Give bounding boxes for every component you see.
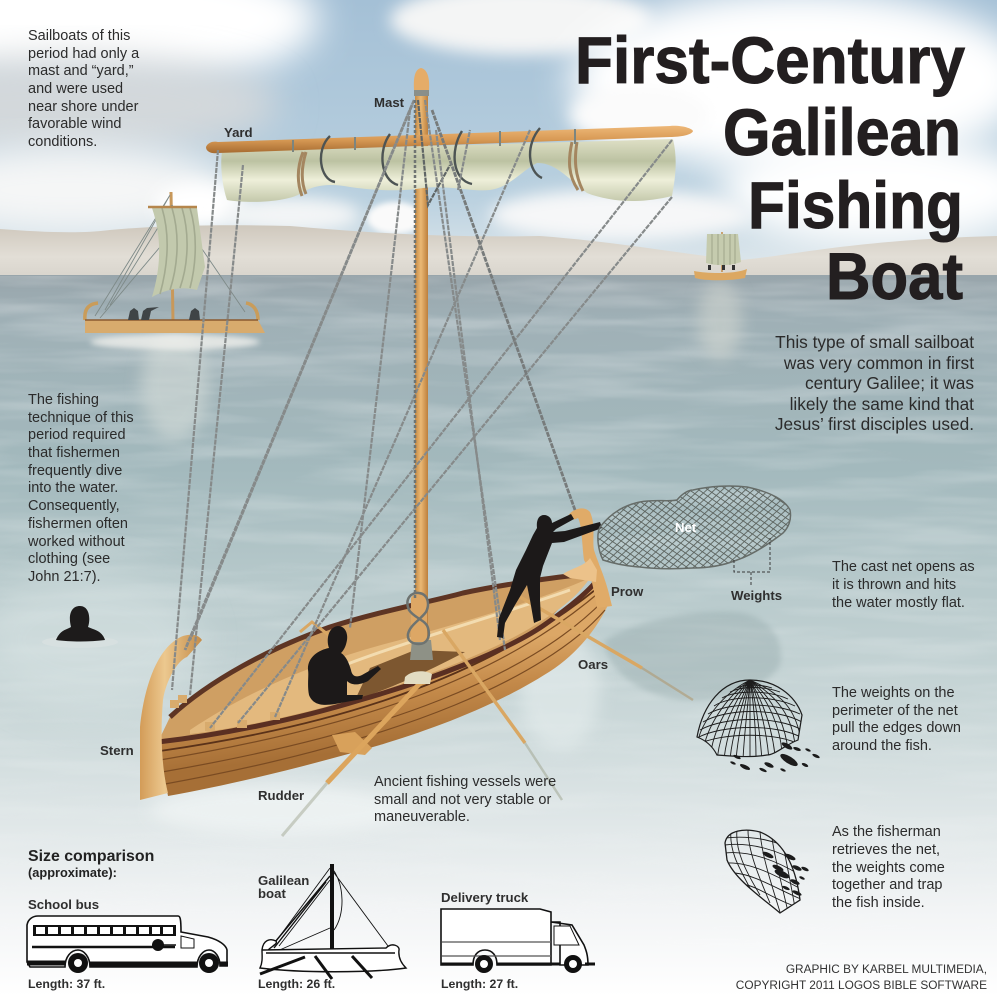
cast net — [598, 486, 791, 569]
mast with top knob — [410, 68, 433, 660]
yard — [206, 126, 693, 185]
text: fishing technique: that fishermen — [28, 445, 120, 461]
trapped fish — [762, 850, 809, 897]
clouds — [0, 0, 997, 245]
fish school — [730, 741, 820, 773]
part labels: Mast — [374, 95, 405, 110]
part labels: Oars — [578, 657, 608, 672]
part labels — [100, 95, 782, 803]
size comparison heading — [28, 848, 154, 880]
text: weights: perimeter of the net — [832, 703, 958, 719]
seated fisherman — [308, 626, 381, 705]
text: fishing technique: period required — [28, 427, 126, 443]
background boat: right — [694, 232, 747, 280]
intro text: sailboat type: was very common in first — [783, 353, 974, 373]
title — [575, 23, 965, 313]
mast partner block — [407, 593, 429, 644]
delivery truck comparison: Length: 27 ft. — [441, 977, 518, 991]
delivery truck comparison: Delivery truck — [441, 890, 529, 905]
title: Boat — [826, 239, 963, 313]
text: retrieving net — [832, 824, 945, 911]
delivery truck comparison — [441, 890, 595, 991]
text: ancient vessels: maneuverable. — [374, 809, 470, 825]
title: First-Century — [575, 23, 965, 97]
standing fisherman — [497, 514, 602, 638]
intro text: sailboat type: This type of small sailboat — [775, 332, 974, 352]
text: sailboats of this period: favorable wind — [28, 116, 122, 132]
text: retrieving net: the fish inside. — [832, 895, 925, 911]
text: sailboats of this period — [28, 28, 140, 150]
text: ancient vessels — [374, 774, 556, 825]
text: sailboats of this period: and were used — [28, 81, 123, 97]
text: retrieving net: the weights come — [832, 860, 945, 876]
intro text: sailboat type: Jesus’ first disciples used. — [775, 414, 974, 434]
prow cap — [563, 558, 597, 582]
water — [0, 275, 997, 996]
intro text: sailboat type — [775, 332, 974, 434]
sail — [221, 139, 676, 202]
title: Fishing — [748, 168, 963, 242]
text: sailboats of this period: Sailboats of this — [28, 28, 130, 44]
text: retrieving net: As the fisherman — [832, 824, 941, 840]
rudder block — [332, 732, 372, 755]
text: retrieving net: together and trap — [832, 877, 942, 893]
text: sailboats of this period: conditions. — [28, 134, 97, 150]
text: fishing technique: into the water. — [28, 480, 118, 496]
text: fishing technique: John 21:7). — [28, 569, 101, 585]
text: weights: pull the edges down — [832, 720, 961, 736]
swimmer — [42, 606, 118, 648]
net shadow on water — [605, 612, 781, 701]
text: ancient vessels: Ancient fishing vessels were — [374, 774, 556, 790]
net diagram: falling over fish — [697, 680, 820, 773]
text: fishing technique: technique of this — [28, 410, 134, 426]
text: weights: around the fish. — [832, 738, 932, 754]
background boat: left — [85, 192, 265, 333]
water ripples — [0, 276, 997, 672]
credit — [736, 962, 987, 992]
part labels: Rudder — [258, 788, 304, 803]
part labels: Yard — [224, 125, 253, 140]
main boat hull — [140, 573, 608, 800]
sky background — [0, 0, 997, 280]
text: cast net: The cast net opens as — [832, 559, 975, 575]
part labels: Prow — [611, 584, 644, 599]
size comparison heading: (approximate): — [28, 865, 117, 880]
oars and rudder — [282, 597, 693, 836]
text: sailboats of this period: mast and “yard,” — [28, 63, 134, 79]
hull planks — [158, 580, 608, 796]
text: weights — [832, 685, 961, 754]
text: fishing technique: Consequently, — [28, 498, 120, 514]
thole pins — [170, 695, 280, 731]
text: retrieving net: retrieves the net, — [832, 842, 940, 858]
text: ancient vessels: small and not very stable or — [374, 792, 551, 808]
school bus comparison: School bus — [28, 897, 99, 912]
prow post — [568, 508, 612, 608]
intro text: sailboat type: century Galilee; it was — [805, 373, 974, 393]
credit: GRAPHIC BY KARBEL MULTIMEDIA, — [786, 962, 987, 976]
credit: COPYRIGHT 2011 LOGOS BIBLE SOFTWARE — [736, 978, 987, 992]
text: fishing technique: clothing (see — [28, 551, 110, 567]
text: fishing technique: frequently dive — [28, 463, 122, 479]
intro text: sailboat type: likely the same kind that — [790, 394, 974, 414]
part labels: Net — [675, 520, 697, 535]
text: fishing technique: The fishing — [28, 392, 99, 408]
part labels: Stern — [100, 743, 134, 758]
text: fishing technique: fishermen often — [28, 516, 128, 532]
text: sailboats of this period: period had only a — [28, 46, 140, 62]
title: Galilean — [723, 95, 961, 169]
school bus comparison: Length: 37 ft. — [28, 977, 105, 991]
text: fishing technique — [27, 392, 134, 585]
weights callout — [734, 538, 770, 586]
gunwale rails — [170, 573, 593, 717]
rigging ropes — [172, 100, 672, 728]
school bus comparison — [27, 897, 228, 991]
text: cast net: it is thrown and hits — [832, 577, 956, 593]
text: fishing technique: worked without — [27, 534, 125, 550]
text: cast net: the water mostly flat. — [832, 595, 965, 611]
net diagram: closed around fish — [725, 830, 809, 913]
Galilean boat comparison — [258, 864, 406, 991]
Galilean boat comparison: boat — [258, 886, 286, 901]
Galilean boat comparison: Length: 26 ft. — [258, 977, 335, 991]
text: cast net — [832, 559, 975, 611]
stern post — [140, 635, 202, 800]
text: weights: The weights on the — [832, 685, 955, 701]
light reflections on water — [0, 280, 742, 835]
text: sailboats of this period: near shore under — [28, 99, 139, 115]
interior of boat — [158, 573, 593, 742]
part labels: Weights — [731, 588, 782, 603]
Galilean boat comparison: Galilean — [258, 873, 309, 888]
distant hills — [0, 225, 997, 278]
size comparison heading: Size comparison — [28, 848, 154, 865]
